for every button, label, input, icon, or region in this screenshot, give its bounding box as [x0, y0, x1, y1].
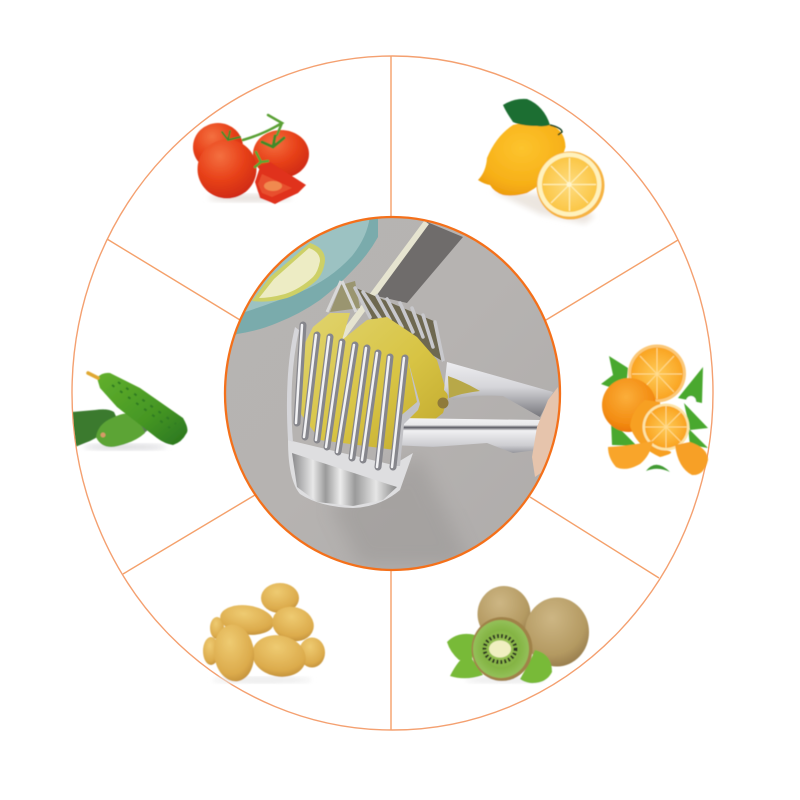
lemon slice — [252, 243, 325, 302]
lower handle — [393, 418, 540, 453]
finger — [532, 387, 560, 477]
photo background: concrete — [220, 210, 565, 575]
icon: lemon with slice — [478, 99, 604, 224]
lemon stem — [438, 398, 448, 408]
slicer left guard — [287, 327, 299, 442]
icon: potatoes — [203, 583, 325, 683]
slicer neck — [396, 361, 420, 466]
back tines — [327, 281, 444, 362]
icon: tomatoes — [193, 115, 309, 204]
upper handle — [444, 362, 553, 417]
icon: oranges — [601, 344, 708, 475]
slicer base — [288, 440, 413, 508]
icon: kiwis — [447, 586, 589, 683]
icon: cucumbers — [70, 373, 187, 450]
center photo: slicer cutting lemon — [220, 210, 565, 575]
wheel spokes — [107, 56, 678, 730]
shadow — [336, 464, 461, 564]
infographic wheel — [71, 55, 714, 731]
lemon — [298, 313, 448, 450]
knife — [372, 222, 463, 303]
front tines — [296, 325, 405, 467]
plate — [236, 218, 378, 335]
center circle border — [225, 217, 560, 570]
outer wheel ring — [72, 56, 713, 730]
